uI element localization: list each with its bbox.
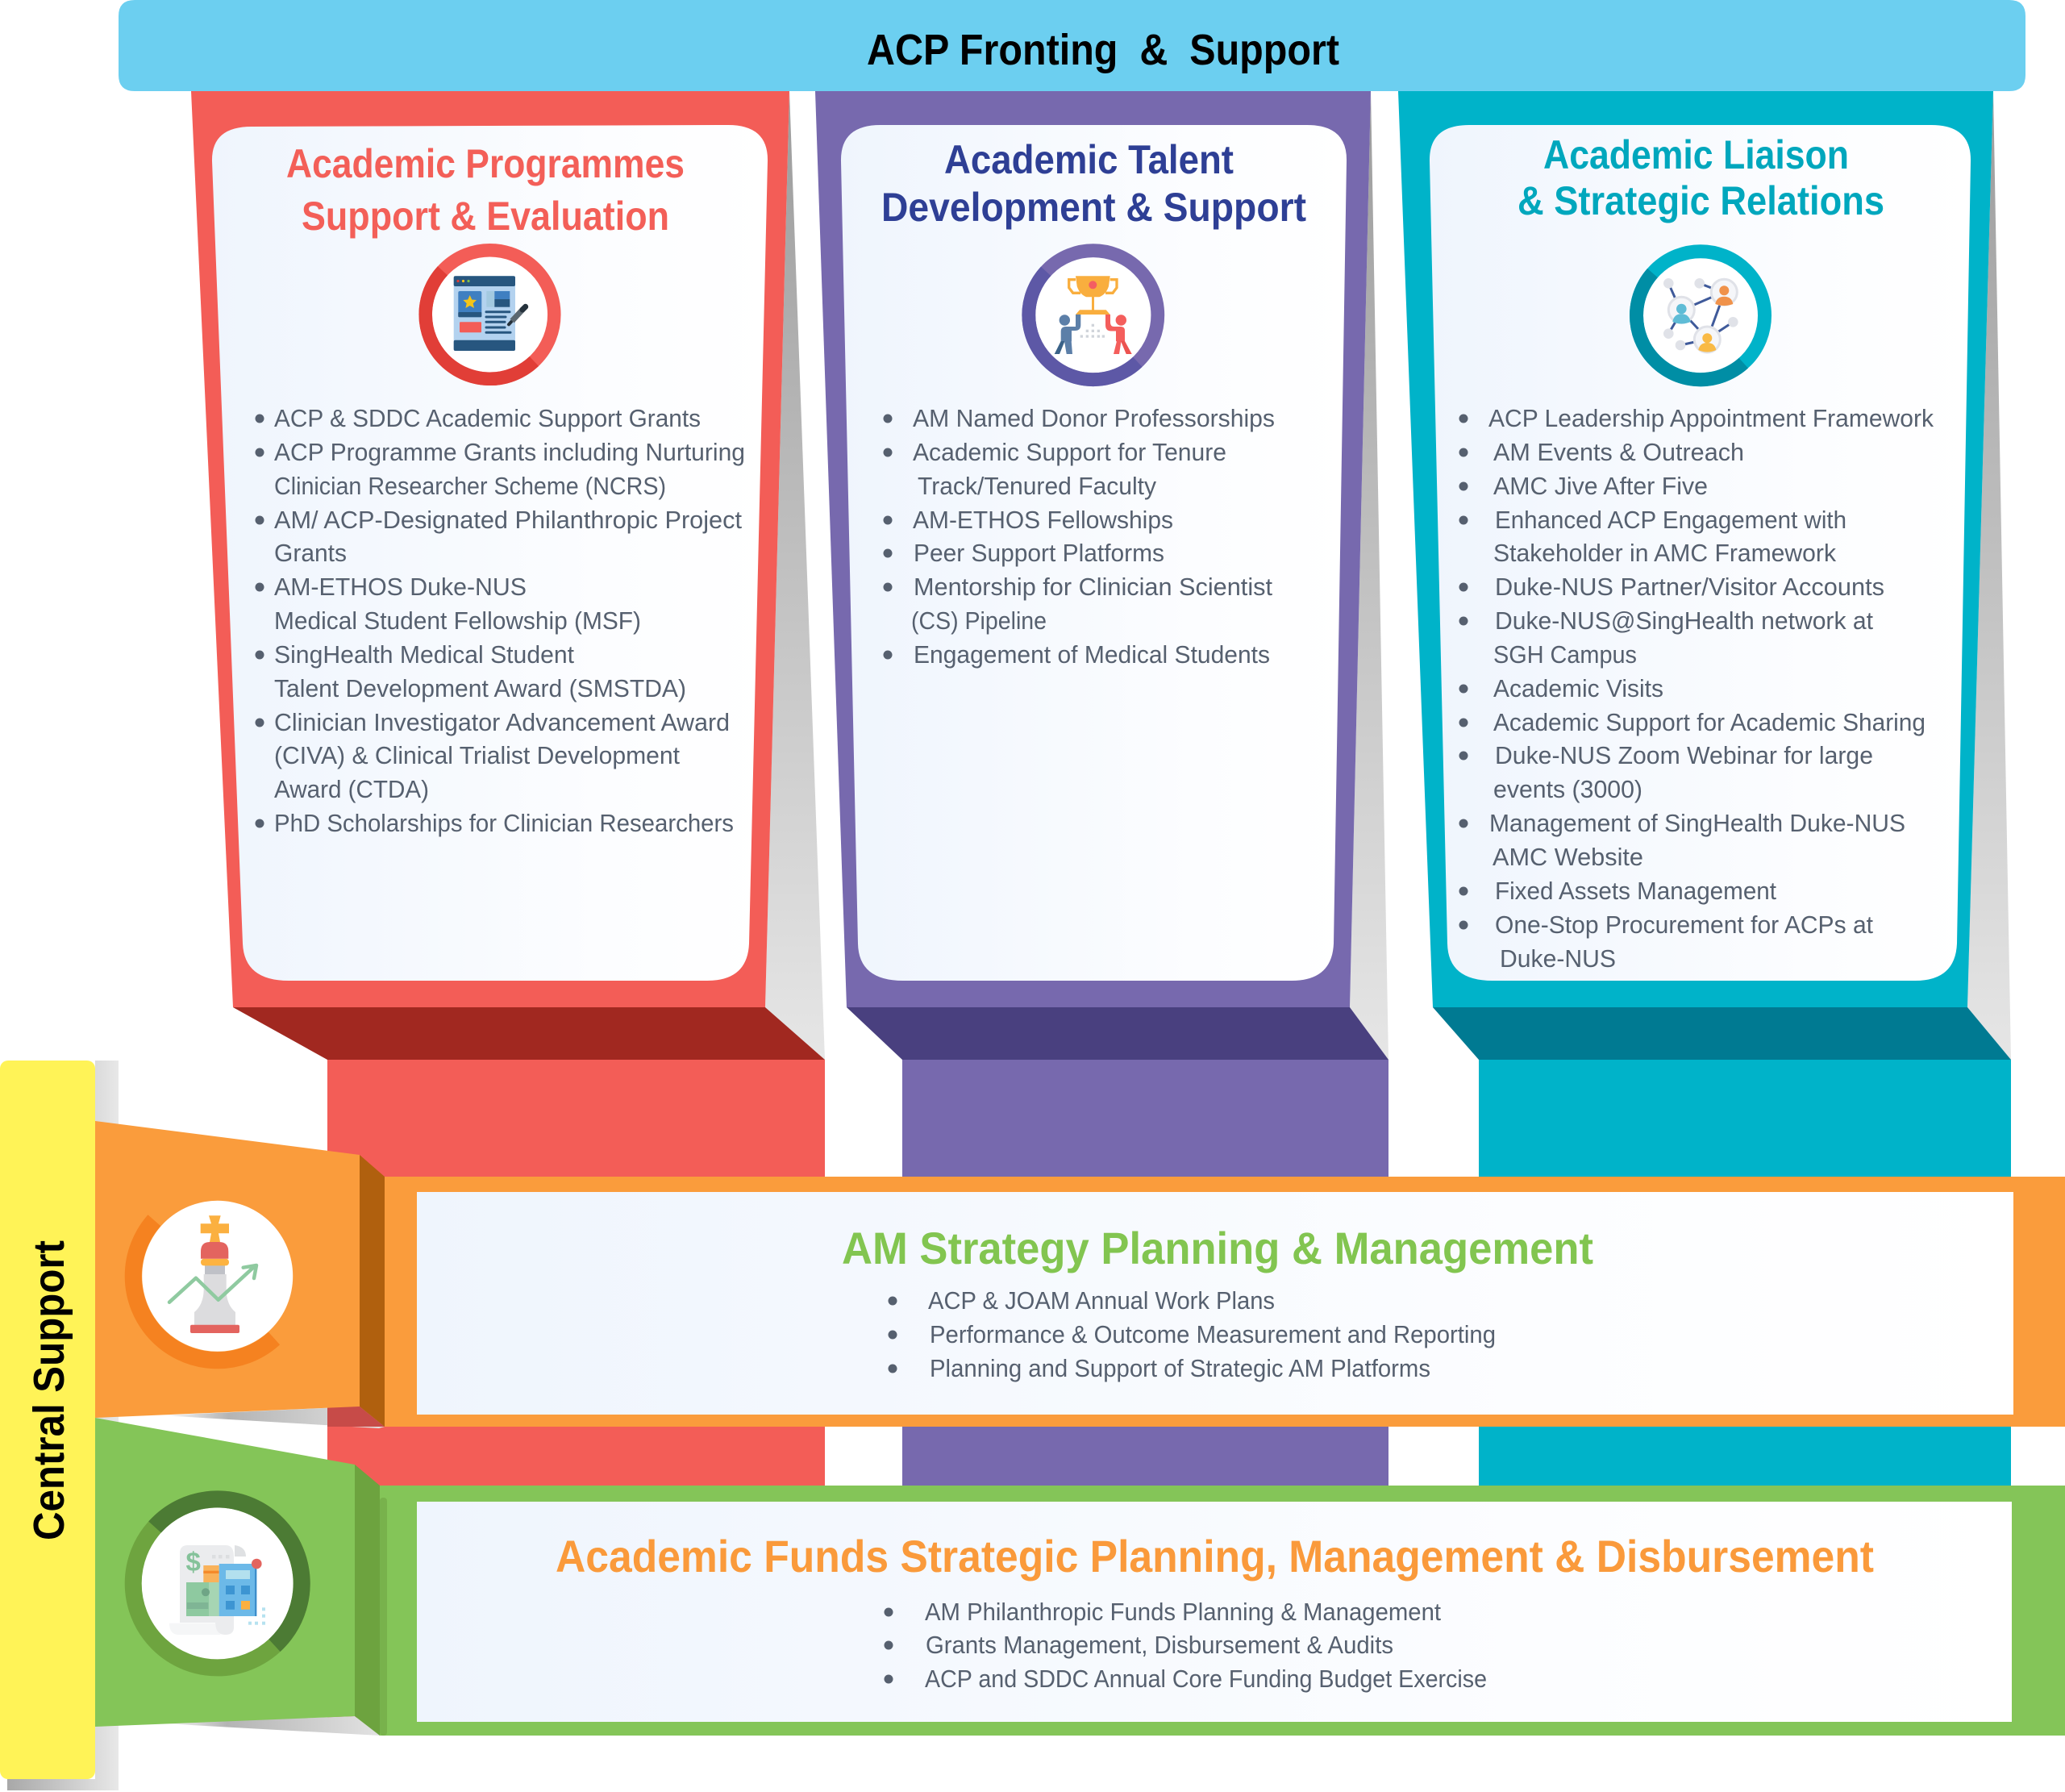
- heading: academic liaison: Academic Liaison: [1543, 132, 1849, 177]
- text block: academic programmes list: Grants: [274, 539, 347, 567]
- panel: AM strategy planning and management: [95, 1121, 2065, 1428]
- text block: academic programmes list: [255, 404, 745, 837]
- icon: trophy and two people: [1002, 224, 1184, 406]
- text block: academic programmes list: Award (CTDA): [274, 775, 429, 803]
- panel: academic programmes column: [191, 91, 825, 1718]
- text block: academic funds list: ACP and SDDC Annual Core Funding Budget Exercise: [925, 1665, 1487, 1693]
- text block: academic programmes list: Talent Development Award (SMSTDA): [274, 674, 686, 702]
- panel: academic talent column: [815, 91, 1388, 1718]
- text block: academic liaison list: ACP Leadership Appointment Framework: [1488, 404, 1934, 432]
- text block: academic liaison list: Enhanced ACP Engagement with: [1495, 506, 1846, 534]
- central support side bar: Central Support: [25, 1240, 73, 1540]
- heading: academic programmes: [286, 141, 685, 239]
- heading: AM strategy: AM Strategy Planning & Management: [842, 1223, 1593, 1273]
- text block: academic programmes list: AM/ ACP-Designated Philanthropic Project: [274, 506, 742, 534]
- text block: academic liaison list: AM Events & Outreach: [1493, 438, 1744, 466]
- heading: academic talent: [881, 137, 1306, 230]
- heading: academic liaison: [1518, 132, 1884, 223]
- text block: academic programmes list: ACP & SDDC Academic Support Grants: [274, 404, 701, 432]
- text block: AM strategy list: Planning and Support of Strategic AM Platforms: [930, 1354, 1430, 1382]
- text block: academic liaison list: Academic Support for Academic Sharing: [1493, 708, 1926, 736]
- text block: academic talent list: AM Named Donor Professorships: [913, 404, 1275, 432]
- text block: academic liaison list: [1459, 404, 1934, 973]
- text block: academic talent list: Track/Tenured Faculty: [918, 472, 1156, 500]
- text block: academic programmes list: AM-ETHOS Duke-NUS: [274, 573, 527, 601]
- text block: academic funds list: [884, 1598, 1487, 1693]
- icon: tablet and pen: [399, 223, 581, 406]
- text block: academic liaison list: Duke-NUS Partner/Visitor Accounts: [1495, 573, 1884, 601]
- heading: academic funds: Academic Funds Strategic Planning, Management & Disbursement: [556, 1531, 1874, 1582]
- heading: academic liaison: & Strategic Relations: [1518, 178, 1884, 223]
- text block: academic programmes list: Clinician Researcher Scheme (NCRS): [274, 472, 666, 500]
- text block: AM strategy list: Performance & Outcome Measurement and Reporting: [930, 1320, 1496, 1348]
- text block: academic liaison list: Duke-NUS Zoom Webinar for large: [1495, 741, 1873, 769]
- text block: academic talent list: AM-ETHOS Fellowships: [913, 506, 1173, 534]
- heading: academic talent: Academic Talent: [944, 137, 1234, 182]
- text block: academic liaison list: AMC Website: [1493, 843, 1643, 871]
- text block: academic programmes list: SingHealth Medical Student: [274, 640, 574, 669]
- text block: academic funds list: AM Philanthropic Funds Planning & Management: [925, 1598, 1441, 1626]
- text block: academic talent list: Mentorship for Clinician Scientist: [914, 573, 1272, 601]
- icon: chess piece and growth arrow: [98, 1157, 336, 1395]
- panel: academic funds strategic planning: [95, 1418, 2065, 1736]
- text block: academic programmes list: Clinician Investigator Advancement Award: [274, 708, 730, 736]
- title banner: ACP Fronting and Support: ACP Fronting & Support: [867, 26, 1339, 74]
- icon: people network: [1610, 225, 1791, 406]
- text block: academic liaison list: events (3000): [1493, 775, 1642, 803]
- text block: academic liaison list: Duke-NUS: [1500, 944, 1616, 973]
- text block: academic liaison list: Academic Visits: [1493, 674, 1663, 702]
- text block: academic liaison list: Stakeholder in AMC Framework: [1493, 539, 1836, 567]
- text block: academic talent list: Engagement of Medical Students: [914, 640, 1270, 669]
- text block: academic liaison list: Duke-NUS@SingHealth network at: [1495, 606, 1873, 635]
- heading: academic programmes: Support & Evaluation: [302, 194, 669, 239]
- text block: academic liaison list: SGH Campus: [1493, 640, 1637, 669]
- title banner: ACP Fronting and Support: [119, 0, 2025, 91]
- text block: AM strategy list: [889, 1286, 1496, 1382]
- text block: academic liaison list: One-Stop Procurement for ACPs at: [1495, 911, 1873, 939]
- text block: academic talent list: (CS) Pipeline: [911, 606, 1047, 635]
- icon: money and calculator: [98, 1465, 336, 1702]
- text block: AM strategy list: ACP & JOAM Annual Work Plans: [928, 1286, 1275, 1315]
- text block: academic talent list: Peer Support Platforms: [914, 539, 1164, 567]
- text block: academic talent list: Academic Support for Tenure: [913, 438, 1226, 466]
- text block: academic programmes list: Medical Student Fellowship (MSF): [274, 606, 641, 635]
- text block: academic liaison list: AMC Jive After Five: [1493, 472, 1708, 500]
- text block: academic programmes list: PhD Scholarships for Clinician Researchers: [274, 809, 734, 837]
- text block: academic programmes list: (CIVA) & Clinical Trialist Development: [274, 741, 680, 769]
- icon: money and calculator: $: [186, 1547, 201, 1577]
- text block: academic programmes list: ACP Programme Grants including Nurturing: [274, 438, 745, 466]
- text block: academic funds list: Grants Management, Disbursement & Audits: [926, 1631, 1393, 1659]
- text block: academic liaison list: Management of SingHealth Duke-NUS: [1489, 809, 1905, 837]
- text block: academic liaison list: Fixed Assets Management: [1495, 877, 1776, 905]
- heading: academic talent: Development & Support: [881, 185, 1306, 230]
- panel: academic liaison column: [1398, 91, 2011, 1718]
- central support side bar: [0, 1061, 119, 1790]
- text block: academic talent list: [884, 404, 1275, 669]
- heading: academic programmes: Academic Programmes: [286, 141, 685, 186]
